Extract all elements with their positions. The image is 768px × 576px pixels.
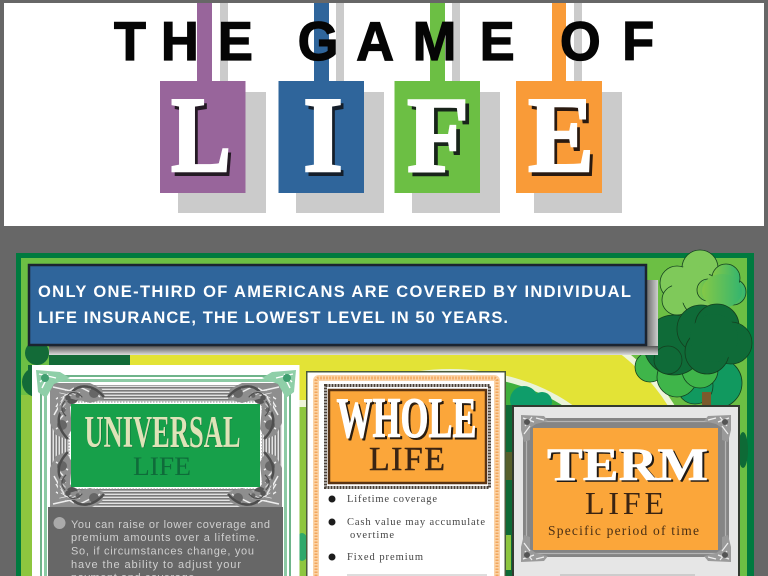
text block: universal: So, if circumstances change, you: [71, 546, 254, 558]
tag: I (blue): I: [306, 80, 346, 199]
banner text: LIFE INSURANCE, THE LOWEST LEVEL IN 50 YEARS.: [38, 309, 508, 327]
header panel: [4, 3, 764, 226]
bullet list: whole: Lifetime coverage: [347, 494, 437, 505]
tag: L (purple): [160, 3, 266, 213]
banner text: ONLY ONE-THIRD OF AMERICANS ARE COVERED BY INDIVIDUAL: [38, 283, 631, 301]
tree cluster: centre, behind cards: [295, 386, 748, 576]
tree cluster: upper right: [635, 250, 752, 408]
banner: [29, 265, 658, 355]
title: THEGAMEOF: [114, 11, 654, 72]
heading box: term: Specific period of time: [548, 523, 699, 538]
tag: L (purple): L: [171, 76, 231, 195]
bullet list: whole: overtime: [350, 530, 394, 541]
bullet list: whole: [328, 494, 485, 563]
dotted border: whole: [316, 378, 497, 576]
heading box: universal: UNIVERSAL: [85, 408, 241, 458]
heading box: universal: [58, 391, 273, 500]
panel: universal life: [32, 365, 300, 576]
certificate frame: whole: [326, 386, 490, 488]
panel: term life: [512, 405, 740, 576]
heading: whole: LIFE: [369, 441, 445, 478]
tag: F (green): F: [411, 80, 473, 199]
certificate frame: universal: [36, 370, 296, 576]
panel: game board: [16, 250, 754, 576]
tag: F (green): [394, 3, 500, 213]
tag: I (blue): I: [303, 76, 343, 195]
heading: whole: [336, 387, 478, 478]
panel: whole life: [306, 371, 506, 576]
tag: E (orange): E: [528, 76, 594, 195]
tag: L (purple): L: [174, 80, 234, 199]
heading box: term: [533, 428, 718, 550]
tag: E (orange): [516, 3, 622, 213]
heading: whole: WHOLE: [338, 389, 478, 452]
tag: I (blue): [278, 3, 384, 213]
text block: universal: have the ability to adjust your: [71, 559, 241, 571]
heading box: term: TERM: [549, 440, 710, 492]
text block: universal: premium amounts over a lifetime.: [71, 532, 259, 544]
banner text: [38, 283, 631, 327]
certificate frame: term: [521, 415, 731, 562]
tag: E (orange): E: [531, 80, 597, 199]
bullet list: whole: Fixed premium: [347, 552, 423, 563]
heading: whole: WHOLE: [336, 387, 476, 450]
board path: yellow track: [104, 280, 696, 576]
tree cluster: upper left: [22, 341, 130, 397]
heading box: universal: LIFE: [133, 452, 191, 481]
text block: universal: You can raise or lower coverage and: [71, 519, 270, 531]
heading box: universal: UNIVERSAL: [84, 407, 240, 457]
heading box: term: TERM: [547, 439, 708, 491]
bullet list: whole: Cash value may accumulate: [347, 517, 485, 528]
tag: F (green): F: [407, 76, 469, 195]
text block: universal: [48, 507, 283, 576]
heading box: term: LIFE: [585, 485, 664, 521]
